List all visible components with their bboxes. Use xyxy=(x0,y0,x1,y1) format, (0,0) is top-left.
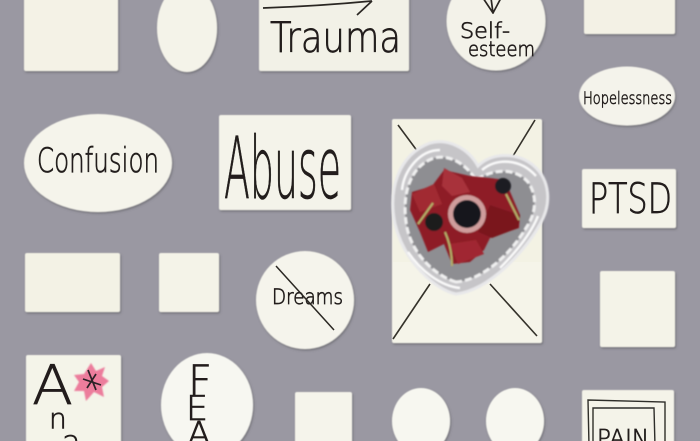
blank tile top left xyxy=(24,0,118,71)
blank oval tile bottom right xyxy=(486,388,544,441)
blank square tile right xyxy=(600,271,675,347)
tile: FEAR: E xyxy=(186,389,208,429)
tile: Dreams crossed out: Dreams xyxy=(272,285,343,309)
tile: Abuse xyxy=(219,115,351,219)
tile: FEAR: F xyxy=(188,357,212,407)
icon: pink flower xyxy=(74,363,109,401)
envelope tile with crossed lines xyxy=(392,119,548,343)
tile: Confusion xyxy=(24,114,172,212)
blank tile middle left xyxy=(25,253,120,312)
tile: Hopelessness xyxy=(579,66,675,126)
tile: Hopelessness: Hopelessness xyxy=(583,89,672,109)
blank tile bottom middle xyxy=(295,392,352,441)
tile: Anna with pink flower: A xyxy=(32,354,73,417)
blank tile top right xyxy=(584,0,675,34)
tile: Self-esteem: Self- xyxy=(460,19,510,43)
tile: Trauma xyxy=(259,0,409,71)
tile: Confusion: Confusion xyxy=(37,141,159,181)
tile: Self-esteem: esteem xyxy=(468,37,535,61)
tile: Trauma: Trauma xyxy=(270,13,401,62)
tile: Self-esteem xyxy=(446,0,546,70)
tile: Anna with pink flower: n xyxy=(49,402,67,435)
blank oval tile top xyxy=(157,0,217,72)
tile: PTSD xyxy=(582,169,676,228)
tile: Dreams crossed out xyxy=(256,251,354,349)
tile: FEAR xyxy=(161,353,253,441)
tile: PAIN in frame xyxy=(582,390,674,441)
icon: glass heart dish with dried red flower xyxy=(393,142,548,294)
blank square tile xyxy=(159,253,219,312)
dried flower petals xyxy=(410,168,520,266)
tile: PTSD: PTSD xyxy=(589,174,672,223)
blank oval tile bottom xyxy=(392,388,450,441)
tile: Anna with pink flower xyxy=(26,354,121,441)
photo of ceramic tiles on grey background: Abuse xyxy=(224,119,341,219)
